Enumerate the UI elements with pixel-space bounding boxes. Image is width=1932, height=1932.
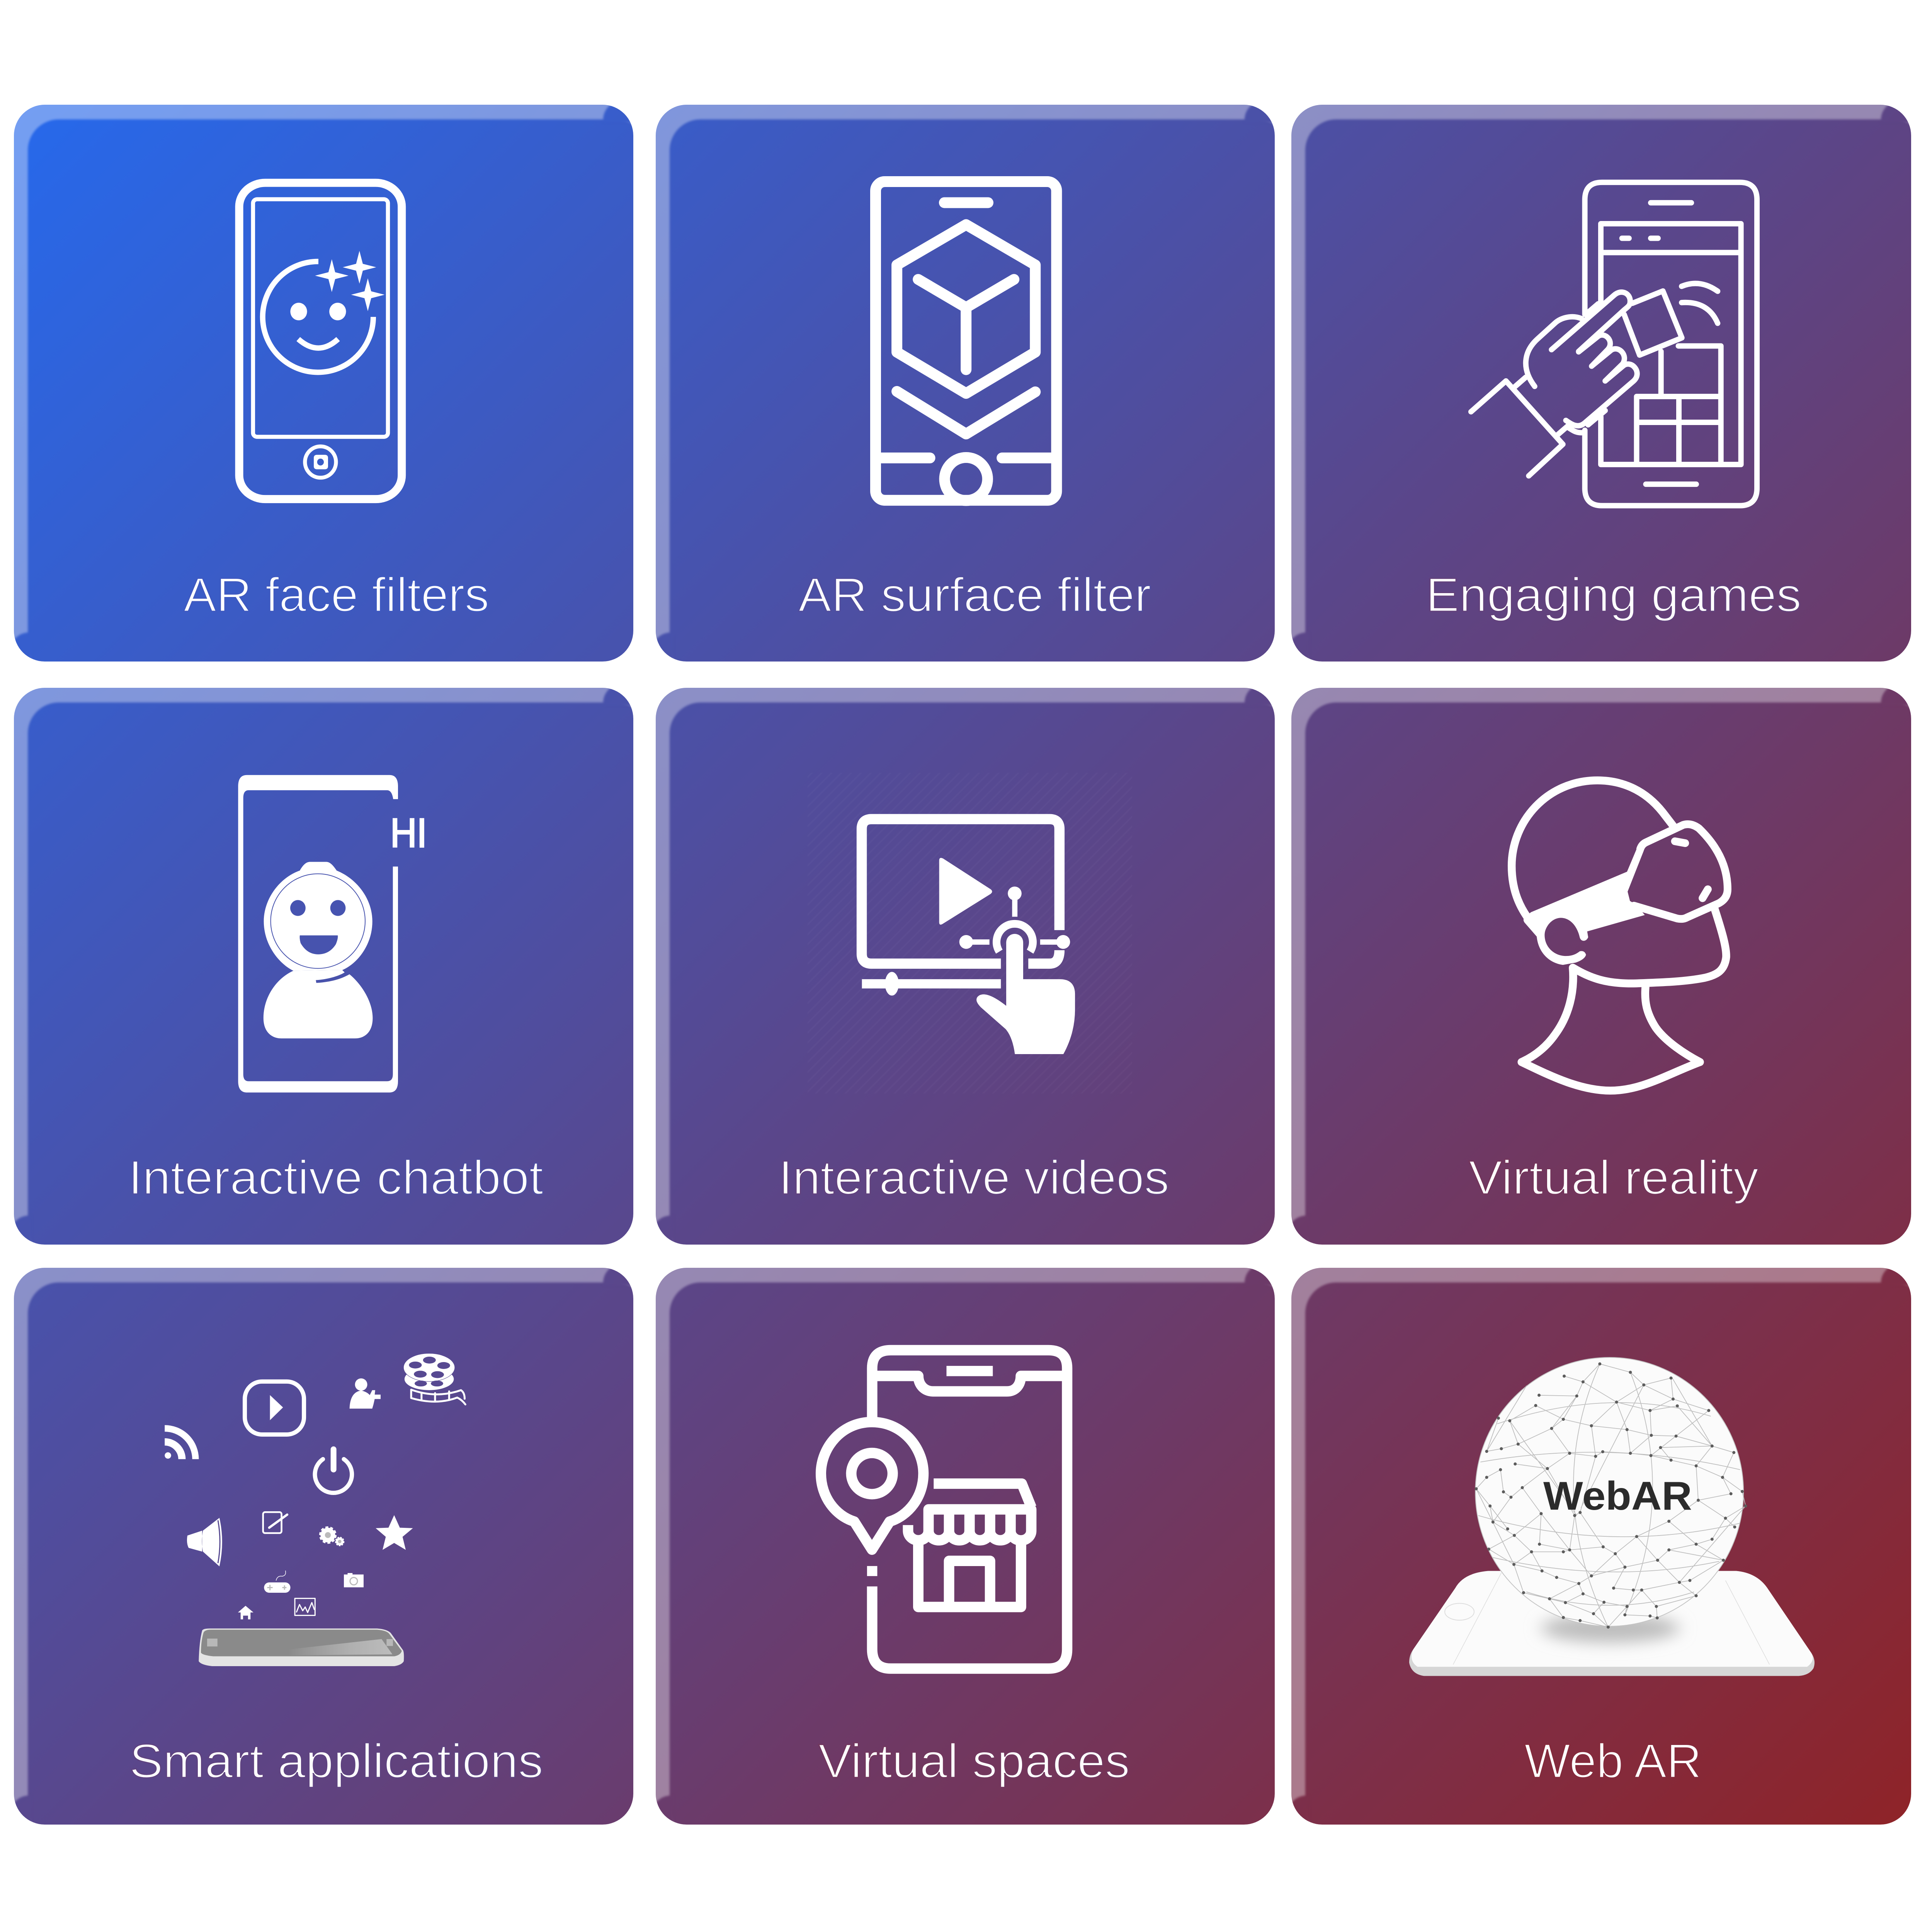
hand: [1526, 292, 1637, 426]
camera icon: [344, 1573, 364, 1587]
motion waves: [1682, 284, 1718, 323]
phone outline and notch: [872, 1350, 1067, 1668]
video frame: [862, 819, 1060, 964]
heading: Virtual spaces: [818, 1735, 1130, 1788]
heading: Interactive chatbot: [128, 1151, 543, 1204]
icon: hand touching game on a phone: [1471, 182, 1757, 506]
robot head: [264, 862, 372, 971]
heading: Smart applications: [129, 1735, 543, 1788]
note and pencil icon: [263, 1512, 282, 1533]
visor slots: [1675, 841, 1708, 898]
sphere label: WebAR: [1543, 1474, 1692, 1519]
map pin: [821, 1422, 923, 1549]
network sphere: [1475, 1357, 1746, 1627]
panel: Web AR: [1291, 1268, 1911, 1825]
head and neck outline: [1512, 781, 1726, 1090]
play triangle: [939, 858, 992, 925]
speaker icon: [187, 1518, 222, 1566]
house icon: [238, 1606, 253, 1619]
icon: phone with smiley face: [239, 183, 402, 499]
cube: [897, 224, 1035, 393]
phone: [199, 1628, 404, 1666]
smiley face: [263, 262, 373, 372]
heading: Virtual reality: [1469, 1151, 1759, 1204]
surface chevron: [897, 391, 1035, 434]
phone outline: [239, 183, 402, 499]
phone outline: [1585, 182, 1757, 506]
chart icon: [295, 1599, 315, 1616]
moving block: [1624, 291, 1682, 355]
progress slider: [862, 979, 1001, 988]
touch ring: [997, 924, 1033, 952]
home bar and button: [881, 452, 1051, 463]
home button: [305, 446, 336, 478]
film reel: [403, 1354, 465, 1405]
headset visor: [1634, 824, 1728, 919]
power icon: [315, 1459, 352, 1493]
heading: Interactive videos: [779, 1151, 1169, 1204]
heading: AR surface filter: [798, 568, 1151, 622]
sparkles: [315, 251, 384, 311]
add-user icon: [350, 1378, 381, 1409]
headset strap and ear: [1524, 846, 1645, 965]
block grid: [1637, 346, 1721, 464]
touch nodes: [972, 899, 1058, 945]
panel: Virtual reality: [1291, 688, 1911, 1245]
heading: AR face filters: [184, 568, 489, 622]
phone base: [1409, 1571, 1815, 1676]
panel: Engaging games: [1291, 105, 1911, 662]
icon: head with VR headset: [1512, 781, 1728, 1090]
panel: Virtual spaces: [656, 1268, 1275, 1825]
icon: apps floating over a phone: [165, 1354, 465, 1666]
speaker: [944, 197, 988, 208]
panel: AR face filters: [14, 105, 633, 662]
icon: phone with 3D cube: [876, 182, 1056, 500]
game screen: [1601, 224, 1741, 464]
heading: Web AR: [1524, 1735, 1702, 1788]
panel: AR surface filter: [656, 105, 1275, 662]
store: [908, 1484, 1031, 1607]
star icon: [376, 1515, 413, 1550]
play button: [245, 1381, 304, 1435]
panel: Interactive videos: [656, 688, 1275, 1245]
phone screen: [253, 199, 388, 437]
hand: [976, 934, 1075, 1054]
gamepad icon: [264, 1582, 291, 1593]
panel: Smart applications: [14, 1268, 633, 1825]
speakers: [1646, 203, 1696, 484]
sleeve: [1471, 377, 1582, 476]
greeting: HI: HI: [390, 810, 427, 856]
phone outline: [876, 182, 1056, 500]
rss icon: [165, 1429, 196, 1459]
heading: Engaging games: [1426, 568, 1801, 622]
icon: web sphere over a phone: [1409, 1357, 1815, 1676]
icon: phone with map pin and store: [821, 1350, 1067, 1668]
robot body: [264, 970, 372, 1038]
panel: Interactive chatbot: [14, 688, 633, 1245]
icon: video player with touching hand: [862, 819, 1075, 1054]
phone frame: [238, 775, 398, 1092]
gears icon: [320, 1528, 335, 1543]
icon: chatbot in a phone: [238, 775, 398, 1092]
